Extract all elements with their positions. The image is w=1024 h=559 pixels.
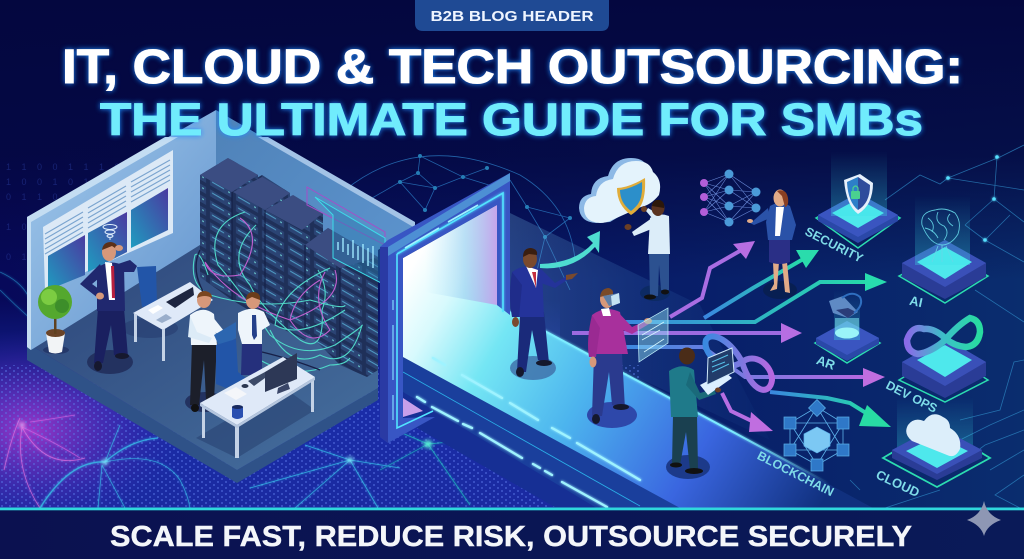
label: dev ops: DEV OPS [884, 378, 939, 416]
panel: security node [803, 150, 900, 266]
circuit lines: right side [850, 145, 1024, 508]
platform [899, 195, 988, 303]
translucent light beam from portal [497, 213, 770, 440]
icon: monitor [265, 353, 297, 394]
panel: cloud node [874, 397, 990, 500]
badge: blog header [415, 0, 609, 31]
person: presenter in navy suit [510, 248, 578, 380]
platform [816, 150, 900, 248]
label: cloud: CLOUD [874, 467, 922, 500]
panel: dev ops node [884, 318, 988, 416]
icon: sparkle [967, 501, 1001, 536]
icon: neural network [700, 170, 760, 226]
icon: infinity loop [907, 318, 980, 354]
background: navy gradient with dotted grid and energy lines: 1 1 0 0 1 1 1 0 1 [6, 162, 139, 172]
panel: AR node [814, 290, 880, 373]
growth arrow from portal [540, 231, 600, 268]
plant [38, 285, 72, 354]
icon: window with blinds [43, 150, 173, 290]
room slab and floor [27, 235, 378, 483]
panel: AI node [899, 195, 988, 310]
icon: blockchain network [784, 400, 849, 471]
platform [815, 290, 880, 363]
background: navy gradient with dotted grid and energy lines: 0 1 [6, 252, 31, 262]
icon: cloud with shield [579, 158, 660, 223]
background: navy gradient with dotted grid and energy lines: 0 1 1 0 1 [6, 192, 77, 202]
icon: VR headset [829, 294, 861, 318]
person: developer with laptop [666, 348, 734, 479]
icon: shield with lock [844, 174, 873, 214]
arrow: green to cloud [770, 392, 891, 427]
chair: front desk [216, 339, 246, 388]
person: engineer at cloud [624, 200, 670, 301]
tagline: SCALE FAST, REDUCE RISK, OUTSOURCE SECURELY [110, 521, 912, 553]
walkway platform from portal [403, 205, 873, 510]
title [62, 41, 963, 145]
flow arrows [572, 241, 891, 432]
platform [883, 426, 990, 487]
holographic wall display [307, 187, 385, 285]
person: staff with hands on face [238, 292, 270, 375]
tangled cables [193, 212, 362, 371]
panel: chaotic in-house server room [27, 110, 415, 483]
arrow: teal to security [704, 250, 819, 318]
background: navy gradient with dotted grid and energy lines: 1 0 [6, 222, 31, 232]
person: woman presenter [747, 190, 797, 299]
person: manager with hand on head [80, 242, 137, 374]
arrow: purple to AR [572, 323, 802, 343]
icon: cloud [906, 414, 960, 456]
arrow: purple to neural network [670, 241, 755, 317]
label: blockchain: BLOCKCHAIN [755, 449, 836, 499]
arrow: blue to AI [620, 273, 887, 322]
holographic panel [638, 308, 668, 362]
desk with monitor [196, 353, 315, 458]
right wall [216, 110, 415, 335]
background: navy gradient with dotted grid and energy lines: 1 0 0 1 0 1 0 [6, 177, 108, 187]
footer bar [0, 501, 1024, 559]
desk and chair: back [122, 266, 213, 361]
label: AI: AI [908, 293, 924, 310]
badge: blog header: B2B BLOG HEADER [430, 9, 594, 25]
server racks [200, 158, 378, 377]
title: IT, CLOUD & TECH OUTSOURCING: [62, 41, 963, 94]
label: security: SECURITY [803, 224, 866, 266]
person: VR user [587, 288, 652, 428]
portal frame [380, 173, 510, 443]
person: staff in white shirt [185, 291, 236, 412]
arrow: purple to blockchain [722, 393, 773, 432]
label: AR: AR [814, 352, 838, 373]
icon: confusion tornado [103, 224, 117, 240]
panel: blockchain node [755, 400, 849, 499]
icon: devops infinity small [705, 336, 772, 390]
icon: wireframe brain [922, 209, 959, 262]
left wall [27, 110, 216, 350]
arrow: blue to dev ops [620, 347, 885, 387]
globe network behind portal [345, 154, 575, 300]
title: THE ULTIMATE GUIDE FOR SMBs [100, 94, 923, 145]
platform [899, 338, 988, 402]
